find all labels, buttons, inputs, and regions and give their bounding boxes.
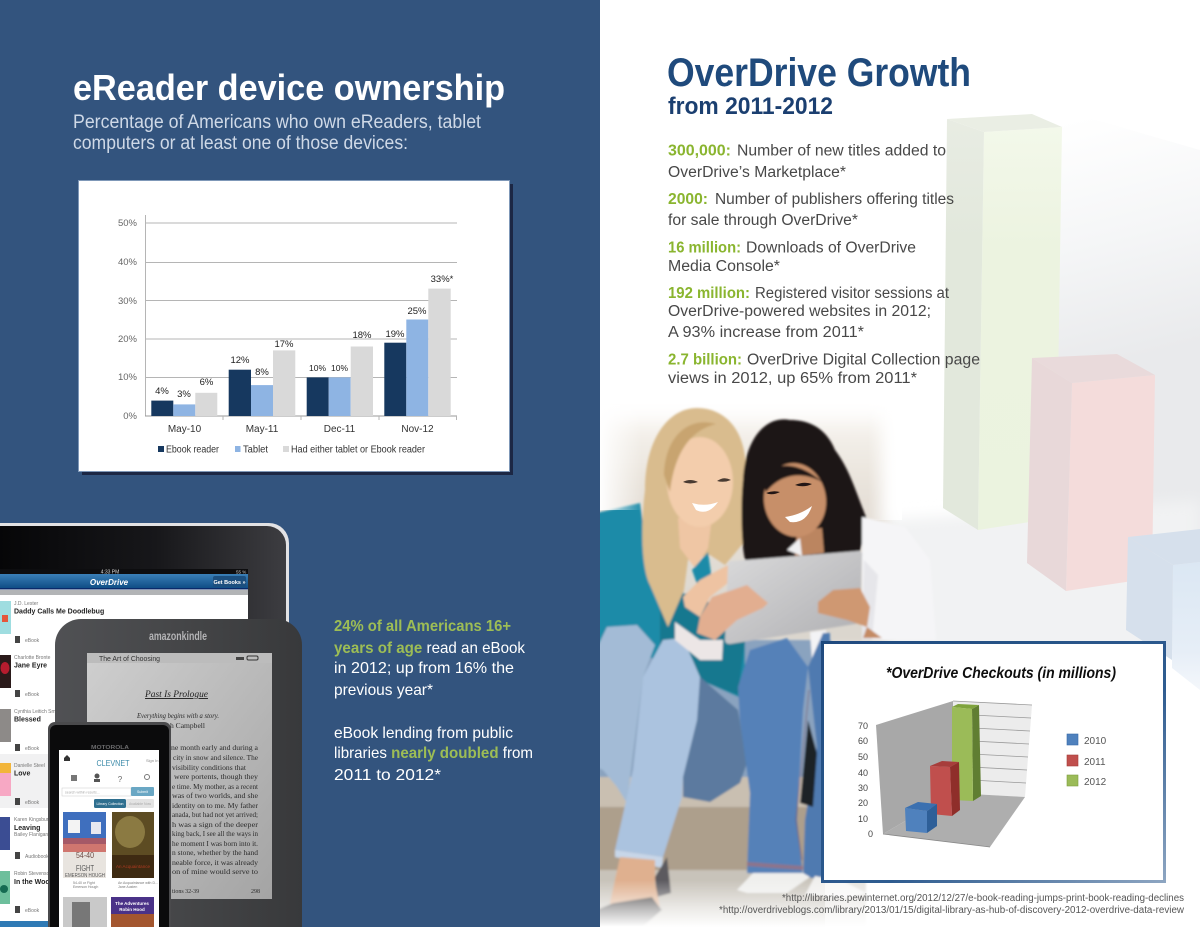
stat: 16 million downloads: Downloads of OverDrive <box>746 240 916 256</box>
grid lines and axis <box>145 215 457 420</box>
stat: 192 million sessions: OverDrive-powered websites in 2012; <box>668 303 931 320</box>
device: Motorola phone: Submit <box>137 790 148 794</box>
value labels: 10% <box>331 363 348 373</box>
shoes and feet <box>737 873 810 893</box>
iPad book list: eBook <box>25 746 40 752</box>
y axis labels <box>858 721 873 839</box>
heading: OverDrive Growth: OverDrive Growth <box>667 51 971 95</box>
Kindle page text: neable force, it was already <box>172 858 258 867</box>
device: Motorola phone: Library Collection <box>96 802 124 806</box>
text block: growth statistics <box>668 142 980 387</box>
left page background <box>0 0 600 927</box>
stat: 2.7 billion page views <box>668 352 980 387</box>
stat: 300,000 titles <box>668 142 946 181</box>
Kindle page text: identity on to me. My father <box>172 801 258 810</box>
stat: 300,000 titles: Number of new titles added to <box>737 142 946 160</box>
x axis labels: Nov-12 <box>401 424 434 435</box>
iPad book list: eBook <box>25 908 40 914</box>
iPad book list: eBook <box>25 692 40 698</box>
phone book cover: 54-40 or Fight: FIGHT <box>76 863 94 873</box>
device: iPad tablet: 55 % <box>236 570 246 574</box>
bars: May-10 <box>151 393 217 416</box>
photo: two women reading a tablet on steps <box>600 406 890 924</box>
background faded 3D bar: blue <box>1126 529 1200 690</box>
value labels: 6% <box>200 377 214 388</box>
stat: 16 million downloads: 16 million: <box>668 240 741 256</box>
device: Motorola phone: MOTOROLA <box>91 745 129 751</box>
y axis labels <box>118 218 138 422</box>
stat: 2000 publishers: Number of publishers offering titles <box>715 191 954 208</box>
iPad book list: In the Woods <box>14 879 58 886</box>
bars: May-11 <box>229 350 295 416</box>
bars: Nov-12 <box>384 289 451 416</box>
subheading: percentage of Americans <box>73 112 482 154</box>
x axis labels <box>168 424 434 435</box>
iPad book list: Danielle Steel <box>14 763 45 769</box>
iPad book list: Karen Kingsbury <box>14 817 51 823</box>
device: Amazon Kindle <box>55 619 302 927</box>
y axis labels: 20 <box>858 798 868 808</box>
jeans: dark-haired woman <box>803 633 830 880</box>
Kindle page text: were portents, though they <box>174 772 258 781</box>
stat: 16 million downloads <box>668 240 916 275</box>
device: Motorola phone: Emerson Hough <box>73 885 98 889</box>
y axis labels: 20% <box>118 334 138 345</box>
Kindle page text <box>136 690 260 895</box>
Kindle page text: was of two worlds, and she <box>172 791 259 800</box>
legend: Had either tablet or Ebook reader <box>291 444 426 456</box>
stat: 2.7 billion page views: OverDrive Digital Collection page <box>747 352 980 368</box>
text block: eBook readership stats: libraries nearly doubled from <box>334 745 533 762</box>
value labels: 10% <box>309 363 326 373</box>
y axis labels: 60 <box>858 736 868 746</box>
Kindle page text: he moment I was born into it. <box>172 839 258 848</box>
device: Motorola phone: Sign In <box>146 758 158 763</box>
y axis labels: 40% <box>118 257 138 268</box>
device: Amazon Kindle: The Art of Choosing <box>99 656 160 663</box>
phone book cover: 54-40 or Fight: EMERSON HOUGH <box>65 873 105 879</box>
right page background <box>600 0 1200 927</box>
footnotes: source URLs: *http://libraries.pewinternet.org/2012/12/27/e-book-reading-jumps-print-book-reading-declines <box>782 893 1184 904</box>
phone book cover: An Acquaintance <box>112 812 154 878</box>
Kindle page text: 298 <box>251 889 260 895</box>
phone book covers: bottom row: The Adventures <box>115 901 149 906</box>
stat: 2.7 billion page views: views in 2012, up 65% from 2011* <box>668 370 917 387</box>
heading: eReader device ownership: eReader device ownership <box>73 67 505 108</box>
device: Motorola phone: Available Now <box>129 802 152 806</box>
phone book cover: 54-40 or Fight: 54-40 <box>76 850 94 860</box>
device: iPad tablet <box>0 523 289 927</box>
jeans: blond woman <box>596 625 655 803</box>
device: Motorola phone: 54-40 or Fight <box>73 881 95 885</box>
iPad book list: Bailey Flanigan <box>14 832 48 838</box>
phone app header: CLEVNET <box>96 759 130 768</box>
stat: 2000 publishers: for sale through OverDrive* <box>668 212 858 229</box>
value labels: 17% <box>274 339 294 350</box>
device: iPad tablet: Get Books » <box>213 580 246 586</box>
iPad book list: Charlotte Bronte <box>14 655 51 661</box>
x axis labels: May-11 <box>246 424 279 435</box>
y axis labels: 0% <box>123 411 138 422</box>
stat: 300,000 titles: 300,000: <box>668 142 731 160</box>
background faded 3D bar: red <box>1027 354 1155 591</box>
iPad book list: eBook <box>25 638 40 644</box>
white jacket <box>860 515 894 641</box>
Kindle page text: ne month early and during a <box>171 743 259 752</box>
subheading: percentage of Americans: computers or at least one of those devices: <box>73 133 408 154</box>
y axis labels: 50% <box>118 218 138 229</box>
footnotes: source URLs: *http://overdriveblogs.com/library/2013/01/15/digital-library-as-hub-of-discovery-2012-overdrive-data-review <box>719 905 1185 916</box>
value labels: 3% <box>177 389 191 400</box>
iPad book list: eBook <box>25 800 40 806</box>
legend: 2011 <box>1084 757 1106 768</box>
iPad book list: Robin Stevenson <box>14 871 52 877</box>
value labels: 8% <box>255 367 269 378</box>
y axis labels: 30% <box>118 296 138 307</box>
y axis labels: 40 <box>858 768 868 778</box>
stat: 192 million sessions: A 93% increase from 2011* <box>668 324 864 341</box>
Kindle page text: anada, but had not yet arrived; <box>172 810 258 819</box>
iPad book list: Love <box>14 770 30 778</box>
stat: 16 million downloads: Media Console* <box>668 258 780 275</box>
tablet and hands <box>683 565 728 617</box>
y axis labels: 0 <box>868 829 873 839</box>
stat: 2000 publishers: 2000: <box>668 191 708 208</box>
Kindle page text: city in snow and silence. The <box>173 753 259 762</box>
text block: eBook readership stats <box>334 618 533 784</box>
stat: 192 million sessions: 192 million: <box>668 285 750 302</box>
iPad book list: Jane Eyre <box>14 662 47 670</box>
Kindle page text: h was a sign of the deeper <box>172 820 259 829</box>
device: Motorola phone: ? <box>118 775 123 784</box>
phone book cover: An Acquaintance: An Acquaintance <box>116 864 150 869</box>
bar: 2012 <box>952 704 981 801</box>
Kindle page text: h Campbell <box>170 721 205 730</box>
subheading: from 2011-2012: from 2011-2012 <box>668 93 833 120</box>
footnotes: source URLs <box>719 893 1185 916</box>
legend: 2012 <box>1084 777 1107 788</box>
device: Motorola phone: search within results... <box>65 790 100 794</box>
stat: 192 million sessions <box>668 285 950 341</box>
iPad book list: J.D. Lester <box>14 601 39 607</box>
Kindle page text: Past Is Prologue <box>144 690 208 700</box>
stat: 2000 publishers <box>668 191 954 229</box>
device: Motorola phone: An Acquaintance with D... <box>118 881 158 885</box>
dark hair woman <box>742 419 868 562</box>
iPad screen <box>0 569 248 927</box>
device: Motorola phone: Jane Austen <box>118 885 137 889</box>
value labels: 33%* <box>431 274 454 285</box>
text block: eBook readership stats: 2011 to 2012* <box>334 767 441 784</box>
Kindle page text: n stone, whether by the hand <box>172 848 258 857</box>
phone search bar <box>62 788 131 796</box>
text block: eBook readership stats: years of age read an eBook <box>334 640 526 657</box>
device: iPad tablet: OverDrive <box>90 578 129 587</box>
value labels <box>155 274 454 400</box>
text block: eBook readership stats: 24% of all Americans 16+ <box>334 618 511 635</box>
Kindle page text: king back, I see all the ways in <box>172 829 258 838</box>
text block: eBook readership stats: eBook lending from public <box>334 725 513 742</box>
value labels: 4% <box>155 386 169 397</box>
legend <box>158 444 426 456</box>
Kindle page text: e time. My mother, as a recent <box>172 782 259 791</box>
value labels: 25% <box>407 306 427 317</box>
value labels: 18% <box>352 330 372 341</box>
value labels: 12% <box>230 355 250 366</box>
y axis labels: 10% <box>118 372 138 383</box>
text block: eBook readership stats: in 2012; up from 16% the <box>334 660 514 677</box>
bar: 2011 <box>930 761 960 816</box>
teal sweater <box>596 503 745 700</box>
white cuff <box>675 622 723 660</box>
y axis labels: 30 <box>858 783 868 793</box>
legend <box>1067 734 1107 788</box>
x axis labels: May-10 <box>168 424 202 435</box>
y axis labels: 50 <box>858 752 868 762</box>
iPad book covers <box>0 601 20 913</box>
panel: OverDrive Checkouts 3D bar chart <box>821 641 1166 883</box>
3D walls and floor <box>876 701 1032 847</box>
stat: 192 million sessions: Registered visitor sessions at <box>755 285 950 302</box>
legend: 2010 <box>1084 736 1107 747</box>
stat: 300,000 titles: OverDrive’s Marketplace* <box>668 164 846 181</box>
bars: Dec-11 <box>307 346 373 416</box>
y axis labels: 10 <box>858 814 868 824</box>
iPad book list <box>0 601 248 914</box>
value labels: 19% <box>385 329 405 340</box>
Kindle page text: visibility conditions that <box>172 763 247 772</box>
chart title: *OverDrive Checkouts (in millions) <box>886 665 1116 682</box>
subheading: percentage of Americans: Percentage of Americans who own eReaders, tablet <box>73 112 482 133</box>
device: Amazon Kindle: amazonkindle <box>149 631 207 643</box>
Kindle page text: on of mine would serve to <box>172 867 258 876</box>
device: Motorola phone <box>48 722 171 927</box>
iPad book list: Daddy Calls Me Doodlebug <box>14 608 104 616</box>
blond hair <box>642 408 746 627</box>
device: iPad tablet: 4:33 PM <box>101 570 119 576</box>
y axis labels: 70 <box>858 721 868 731</box>
stat: 2.7 billion page views: 2.7 billion: <box>668 352 742 368</box>
text block: eBook readership stats: previous year* <box>334 682 433 699</box>
iPad book list: Blessed <box>14 716 41 724</box>
legend: Tablet <box>243 444 268 456</box>
smiles and eyes <box>683 478 812 522</box>
phone book cover: 54-40 or Fight <box>63 812 106 879</box>
Kindle page text: Everything begins with a story. <box>136 711 219 720</box>
Kindle page text: tions 32-39 <box>172 889 199 895</box>
phone book covers: bottom row <box>63 897 154 927</box>
panel: bar chart of device ownership <box>78 180 513 475</box>
phone book covers: bottom row: Robin Hood <box>119 907 145 912</box>
x axis labels: Dec-11 <box>324 424 356 435</box>
bar: 2010 <box>905 802 937 833</box>
iPad book list: Leaving <box>14 825 40 832</box>
iPad book list: Cynthia Leitich Smith <box>14 709 61 715</box>
background faded 3D bar: green <box>943 114 1062 530</box>
iPad book list: Audiobook <box>25 854 49 860</box>
legend: Ebook reader <box>166 444 220 456</box>
